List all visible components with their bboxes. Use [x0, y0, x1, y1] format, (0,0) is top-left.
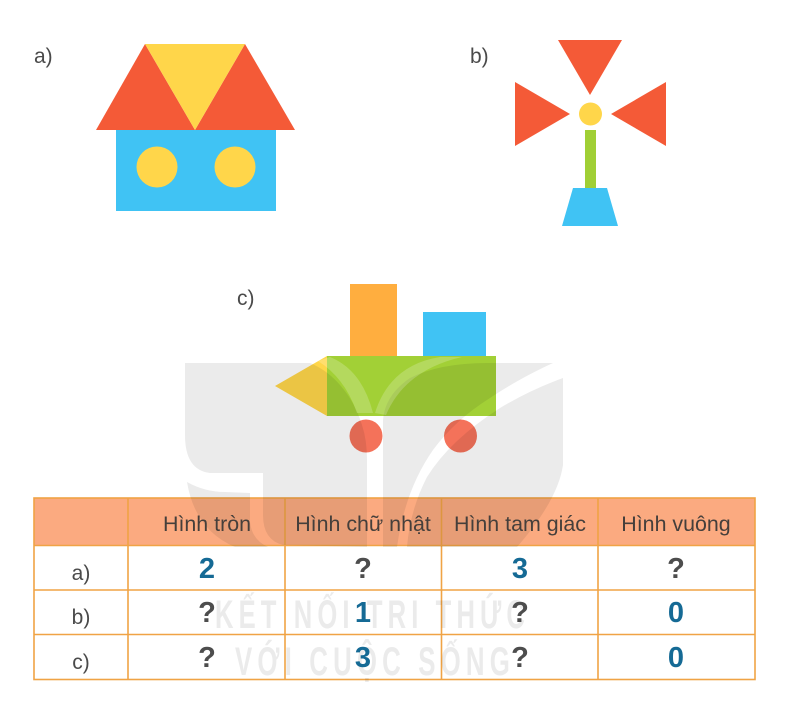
table header labels: Hình tam giác: [454, 512, 586, 536]
watermark text: [215, 591, 530, 684]
row b: [72, 597, 684, 629]
row b: b): [72, 606, 90, 629]
row a: 2: [199, 553, 215, 585]
row c: ?: [511, 642, 529, 674]
row c: ?: [198, 642, 216, 674]
row b: ?: [198, 597, 216, 629]
table header labels: Hình chữ nhật: [295, 512, 431, 536]
figure a: house: [96, 44, 295, 211]
row a: ?: [667, 553, 685, 585]
row a: 3: [512, 553, 528, 585]
label b: b): [470, 45, 489, 68]
watermark text: KẾT NỐI TRI THỨC: [215, 591, 530, 637]
row a: ?: [354, 553, 372, 585]
table grid: [34, 498, 755, 680]
table header labels: [163, 512, 731, 536]
row b: ?: [511, 597, 529, 629]
watermark arcs on truck: [318, 357, 462, 415]
row c: [72, 642, 684, 674]
row b: 0: [668, 597, 684, 629]
table header labels: Hình tròn: [163, 512, 251, 536]
row a: a): [72, 562, 90, 585]
row b: 1: [355, 597, 371, 629]
row a: [72, 553, 685, 585]
watermark logo: [185, 363, 563, 547]
watermark text: VỚI CUỘC SỐNG: [235, 638, 515, 684]
table header background: [34, 498, 755, 545]
figure c: truck: [275, 284, 496, 452]
label c: c): [237, 287, 254, 310]
row c: c): [72, 651, 90, 674]
row c: 0: [668, 642, 684, 674]
table: [34, 498, 755, 680]
row c: 3: [355, 642, 371, 674]
label a: a): [34, 45, 53, 68]
figure b: windmill: [515, 40, 666, 226]
table header labels: Hình vuông: [621, 512, 731, 536]
